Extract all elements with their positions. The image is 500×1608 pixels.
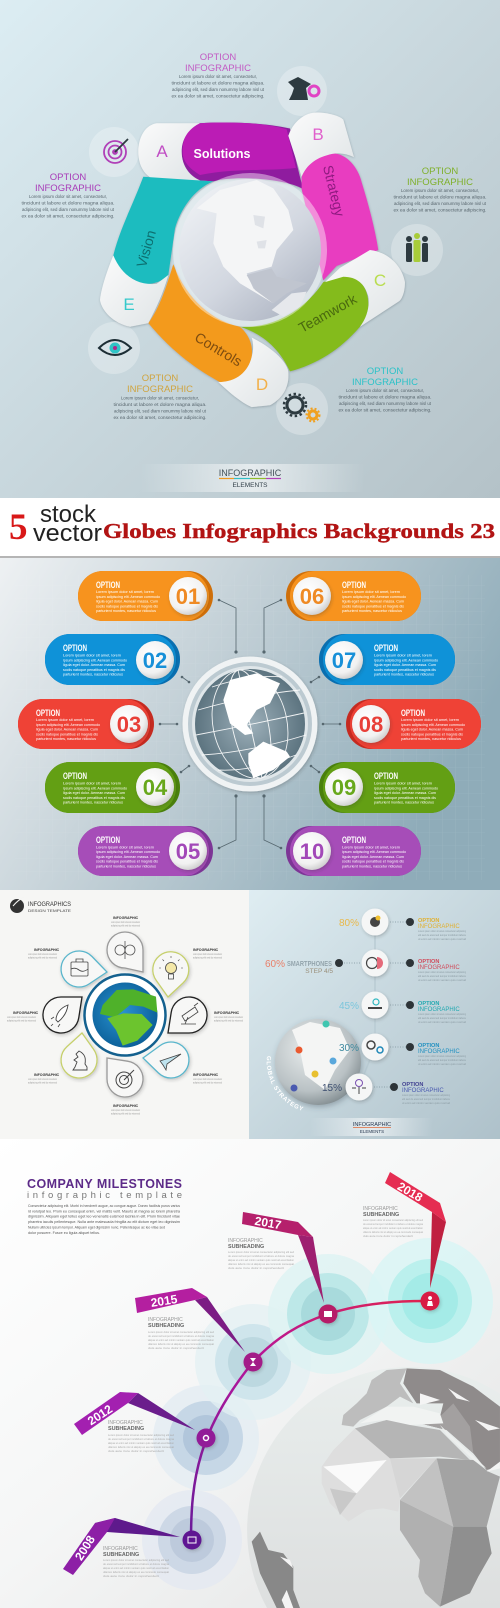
option pill 01: OPTION <box>96 580 120 590</box>
option pill 07: sociis natoque penatibus et magnis dis <box>374 667 436 672</box>
pin labels: adipiscing elit sed do eiusmod <box>28 956 57 960</box>
subheading 2012: INFOGRAPHIC <box>108 1420 143 1426</box>
callout: left option: adipiscing elit, sed diam nonummy labore nisl ut <box>22 207 115 212</box>
step 60 percent: INFOGRAPHIC <box>418 965 460 971</box>
central green globe <box>84 974 166 1056</box>
subheading 2018: ullamco laboris nisi ut aliquip ex ea commodo consequat <box>363 1230 423 1234</box>
callout: bottom left option: OPTION <box>142 373 178 384</box>
panel: company milestones timeline <box>0 1139 500 1608</box>
logo: 5 stock vector: stock <box>40 501 97 528</box>
option pill 01: ipsum adipiscing elit. Aenean commodo <box>96 594 161 599</box>
letters on tabs: E <box>123 295 135 314</box>
target rings 2008 <box>142 1490 242 1590</box>
flag 2012 <box>74 1392 216 1448</box>
pin: right <box>168 997 207 1033</box>
icon: eye <box>99 340 131 355</box>
step 45 percent: elit sed do eiusmod tempor incididunt labore <box>418 1016 466 1020</box>
option pill 03: 03 <box>117 712 141 737</box>
letters on tabs: B <box>312 125 324 144</box>
center globe <box>182 656 318 792</box>
letters on tabs: D <box>256 375 268 394</box>
callout: left option: tincidunt ut labore et dolore magna aliqua. <box>22 200 114 206</box>
option pill 08: ipsum adipiscing elit. Aenean commodo <box>401 722 466 727</box>
icon: target <box>104 139 128 163</box>
subheading 2008: ullamco laboris nisi ut aliquip ex ea commodo consequat <box>103 1570 169 1574</box>
option pill 03: ipsum adipiscing elit. Aenean commodo <box>36 722 101 727</box>
option pill 08: sociis natoque penatibus et magnis dis <box>401 732 463 736</box>
callout: bottom left option: INFOGRAPHIC <box>127 384 193 395</box>
option pill 07: Lorem ipsum dolor sit amet, lorem <box>374 652 433 658</box>
step 15 percent: ut enim ad minim veniam quis nostrud <box>402 1101 450 1105</box>
subheading 2017: do eiusmod tempor incididunt ut labore et dolore magna <box>228 1254 294 1258</box>
option pill 01: ligula eget dolor. Aenean massa. Cum <box>96 598 159 604</box>
callout: left option: ex ea dolor sit amet, consectetur adipiscing. <box>22 214 114 218</box>
option pill 07: ligula eget dolor. Aenean massa. Cum <box>374 662 437 667</box>
option pill 09: parturient montes, nascetur ridiculus <box>374 800 434 804</box>
pin labels: INFOGRAPHIC <box>34 948 60 952</box>
step 60 percent: OPTION <box>418 959 439 965</box>
pin labels: INFOGRAPHIC <box>193 1073 219 1077</box>
pin labels: INFOGRAPHIC <box>113 916 139 920</box>
subheading 2012: aliqua ut enim ad minim veniam quis nostrud exercitation <box>108 1441 174 1445</box>
grid texture <box>15 575 485 880</box>
option pill 10: sociis natoque penatibus et magnis dis <box>342 858 404 864</box>
pin labels: INFOGRAPHIC <box>214 1011 240 1015</box>
pin labels: adipiscing elit sed do eiusmod <box>193 1080 222 1084</box>
option pill 02 <box>45 634 180 685</box>
option pill 04: 04 <box>143 775 168 800</box>
option pill 02: 02 <box>143 648 167 673</box>
option pill 02: ligula eget dolor. Aenean massa. Cum <box>63 662 126 667</box>
subheading 2018: INFOGRAPHIC <box>363 1206 398 1212</box>
callout: bottom left option: adipiscing elit, sed diam nonummy labore nisl ut <box>114 408 207 414</box>
step 80 percent: OPTION <box>418 918 439 924</box>
petal labels <box>133 146 360 369</box>
intro text: dolor posuere. Fusce eu ligula aliquet tellus. <box>28 1231 100 1235</box>
option pill 06: 06 <box>300 584 324 609</box>
pin labels: Lorem ipsum dolor sit amet consectetur <box>111 1108 140 1112</box>
step 30 percent <box>339 1034 466 1066</box>
subheading 2017: SUBHEADING <box>228 1244 264 1250</box>
option pill 04: Lorem ipsum dolor sit amet, lorem <box>63 780 122 786</box>
callout: bottom left option <box>114 373 207 420</box>
step 45 percent: Lorem ipsum dolor sit amet consectetur adipiscing <box>418 1012 466 1016</box>
option pill 03: Lorem ipsum dolor sit amet, lorem <box>36 717 95 722</box>
subheading 2015: INFOGRAPHIC <box>148 1317 183 1323</box>
curved label: GLOBAL STRATEGY <box>266 1056 304 1110</box>
panel: five-petal globe infographic <box>0 0 500 498</box>
step 60 percent: Lorem ipsum dolor sit amet consectetur adipiscing <box>418 970 466 974</box>
callout: bottom right option: ex ea dolor sit amet, consectetur adipiscing. <box>338 408 432 412</box>
option pill 06 <box>286 571 421 621</box>
step 45 percent: ut enim ad minim veniam quis nostrud <box>418 1020 466 1024</box>
option pill 05: Lorem ipsum dolor sit amet, lorem <box>96 844 155 850</box>
step 60 percent: elit sed do eiusmod tempor incididunt labore <box>418 974 466 978</box>
subheading 2017: INFOGRAPHIC <box>228 1238 263 1244</box>
option pill 01 <box>78 571 213 621</box>
pin labels: INFOGRAPHIC <box>13 1011 39 1015</box>
pin labels: adipiscing elit sed do eiusmod <box>7 1018 36 1022</box>
pin labels <box>7 916 243 1116</box>
flag 2012: 2012 <box>85 1402 115 1428</box>
pin labels: adipiscing elit sed do eiusmod <box>28 1080 57 1084</box>
step 80 percent: INFOGRAPHIC <box>418 924 460 930</box>
subheading 2015 <box>148 1317 214 1350</box>
step 15 percent: Lorem ipsum dolor sit amet consectetur adipiscing <box>402 1093 450 1097</box>
subheading 2018: do eiusmod tempor incididunt ut labore et dolore magna <box>363 1222 423 1226</box>
option pill 02: OPTION <box>63 643 87 653</box>
option pill 01: sociis natoque penatibus et magnis dis <box>96 604 158 608</box>
panel: ten options around globe <box>0 558 500 890</box>
heading: COMPANY MILESTONES <box>27 1177 182 1191</box>
option pill 01: 01 <box>176 584 200 609</box>
subheading 2008: INFOGRAPHIC <box>103 1546 138 1552</box>
option pill 09: ipsum adipiscing elit. Aenean commodo <box>374 786 439 790</box>
option pill 10: ipsum adipiscing elit. Aenean commodo <box>342 849 407 854</box>
option pill 03: OPTION <box>36 708 60 718</box>
timeline curve <box>191 1301 430 1540</box>
petal labels: Solutions <box>194 146 250 161</box>
panel: pin petals around green globe <box>0 890 249 1140</box>
step 60 percent: ut enim ad minim veniam quis nostrud <box>418 978 466 982</box>
option pill 09 <box>319 762 455 813</box>
option pill 10 <box>286 826 421 876</box>
flag 2018 <box>385 1172 446 1310</box>
pin labels: Lorem ipsum dolor sit amet consectetur <box>193 952 222 956</box>
step 30 percent: elit sed do eiusmod tempor incididunt labore <box>418 1058 466 1062</box>
petal labels: Strategy <box>320 164 348 218</box>
pin: lower left <box>61 1033 97 1078</box>
callout: left option: Lorem ipsum dolor sit amet, consectetur, <box>29 194 107 199</box>
option pill 02: sociis natoque penatibus et magnis dis <box>63 667 125 672</box>
callout: bottom right option: adipiscing elit, sed diam nonummy labore nisl ut <box>339 401 432 406</box>
step 30 percent: Lorem ipsum dolor sit amet consectetur adipiscing <box>418 1054 466 1058</box>
option pill 07 <box>319 634 455 685</box>
option pill 05 <box>78 826 213 876</box>
step 30 percent: OPTION <box>418 1043 439 1049</box>
polygon world globe <box>247 1367 500 1608</box>
pin: left <box>43 997 82 1033</box>
subheading 2008: Lorem ipsum dolor sit amet consectetur adipiscing elit sed <box>103 1558 169 1562</box>
callout: bottom left option: ex ea dolor sit amet, consectetur adipiscing. <box>114 415 206 420</box>
badge: infographic elements <box>310 1118 433 1136</box>
step 60 percent: STEP 4/5 <box>305 968 333 975</box>
option pill 07: OPTION <box>374 643 398 653</box>
banner <box>0 498 500 558</box>
subheading 2008: SUBHEADING <box>103 1552 139 1558</box>
pin labels: INFOGRAPHIC <box>113 1104 139 1108</box>
step 80 percent: ut enim ad minim veniam quis nostrud <box>418 937 466 941</box>
option pill 10: OPTION <box>342 835 366 845</box>
subheading 2018: duis aute irure dolor in reprehenderit <box>363 1234 413 1238</box>
badge: infographic elements: ELEMENTS <box>360 1129 384 1134</box>
pin: bottom <box>107 1058 143 1097</box>
option pill 04: sociis natoque penatibus et magnis dis <box>63 795 125 800</box>
subheading 2017 <box>228 1238 294 1270</box>
target rings 2015 <box>195 1304 311 1420</box>
option pill 04: ipsum adipiscing elit. Aenean commodo <box>63 786 128 790</box>
subheading 2017: ullamco laboris nisi ut aliquip ex ea commodo consequat <box>228 1262 294 1266</box>
subheading 2015: SUBHEADING <box>148 1323 184 1329</box>
petal ring <box>100 112 405 407</box>
flag 2018: 2018 <box>395 1179 425 1205</box>
subheading 2017: Lorem ipsum dolor sit amet consectetur adipiscing elit sed <box>228 1250 294 1254</box>
pin labels: Lorem ipsum dolor sit amet consectetur <box>193 1077 222 1081</box>
callout: left option: OPTION <box>50 172 86 183</box>
option pill 08: OPTION <box>401 708 425 718</box>
badge: infographic elements <box>140 464 365 492</box>
pin: upper left <box>61 951 107 987</box>
option pill 02: Lorem ipsum dolor sit amet, lorem <box>63 652 122 658</box>
pin: upper right <box>153 952 189 997</box>
subheading 2015: do eiusmod tempor incididunt ut labore et dolore magna <box>148 1334 214 1338</box>
option pill 05: ligula eget dolor. Aenean massa. Cum <box>96 854 159 859</box>
option pill 10: 10 <box>300 839 324 864</box>
spine line <box>359 922 375 1087</box>
subheading 2012: duis aute irure dolor in reprehenderit <box>108 1449 164 1453</box>
step 15 percent: INFOGRAPHIC <box>402 1088 444 1094</box>
option pill 03: ligula eget dolor. Aenean massa. Cum <box>36 726 99 732</box>
option pill 03: sociis natoque penatibus et magnis dis <box>36 732 98 736</box>
option pill 07: parturient montes, nascetur ridiculus <box>374 672 434 676</box>
option pill 05: 05 <box>176 839 200 864</box>
callout: bottom right option: tincidunt ut labore et dolore magna aliqua. <box>338 394 432 400</box>
callout: right option: Lorem ipsum dolor sit amet, consectetur, <box>401 188 479 193</box>
subheading 2018: aliqua ut enim ad minim veniam quis nostrud exercitation <box>363 1226 423 1230</box>
target rings 2018 <box>367 1238 493 1364</box>
option pill 03 <box>18 699 154 749</box>
step 45 percent <box>339 992 466 1024</box>
option pill 01: parturient montes, nascetur ridiculus <box>96 608 156 613</box>
callout: bottom left option: Lorem ipsum dolor sit amet, consectetur, <box>121 396 199 400</box>
grey globe <box>275 1019 361 1105</box>
option pill 06: ligula eget dolor. Aenean massa. Cum <box>342 598 405 604</box>
option pill 06: sociis natoque penatibus et magnis dis <box>342 604 404 608</box>
option pill 01: Lorem ipsum dolor sit amet, lorem <box>96 589 155 594</box>
intro text: Nullam ultricies ipsum tempor. Aliquam eget dignissim nunc. Pellentesque ac leo vitae sed <box>28 1226 165 1230</box>
logo: INFOGRAPHICS <box>28 901 72 908</box>
flag 2015: 2015 <box>150 1292 179 1310</box>
callout: top option: ex ea dolor sit amet, consectetur adipiscing. <box>172 94 264 98</box>
option pill 03: parturient montes, nascetur ridiculus <box>36 736 96 741</box>
step 60 percent: SMARTPHONES <box>287 961 332 968</box>
logo: 5 stock vector: vector <box>33 520 102 547</box>
petal labels: Controls <box>192 329 245 369</box>
intro text <box>28 1204 180 1235</box>
callout: right option: tincidunt ut labore et dolore magna aliqua. <box>394 194 486 200</box>
step 80 percent <box>339 908 466 941</box>
option pill 05: ipsum adipiscing elit. Aenean commodo <box>96 849 161 854</box>
step 30 percent: ut enim ad minim veniam quis nostrud <box>418 1062 466 1066</box>
option pill 08: Lorem ipsum dolor sit amet, lorem <box>401 717 460 722</box>
option pill 02: ipsum adipiscing elit. Aenean commodo <box>63 658 128 662</box>
callout: bottom right option <box>338 366 432 412</box>
letters on tabs: A <box>156 142 168 161</box>
step 80 percent: 80% <box>339 918 359 929</box>
option pill 04 <box>45 762 180 813</box>
pin labels: adipiscing elit sed do eiusmod <box>111 924 140 928</box>
icon: chess knight and gear <box>288 77 319 100</box>
intro text: Consectetur adipiscing elit. Morbi in hendrerit augue, ac congue augue. Donec facilisis purus varius <box>28 1204 180 1208</box>
pin labels: adipiscing elit sed do eiusmod <box>193 956 222 960</box>
subheading 2012: ullamco laboris nisi ut aliquip ex ea commodo consequat <box>108 1445 174 1449</box>
logo: 5 stock vector <box>9 501 102 548</box>
flag 2015 <box>135 1288 262 1372</box>
callout: right option: INFOGRAPHIC <box>407 177 473 188</box>
subheading 2008: do eiusmod tempor incididunt ut labore et dolore magna <box>103 1562 169 1566</box>
option pill 08 <box>346 699 481 749</box>
subheading 2018: Lorem ipsum dolor sit amet consectetur adipiscing elit sed <box>363 1218 423 1222</box>
subheading 2015: duis aute irure dolor in reprehenderit <box>148 1346 204 1350</box>
option pill 10: Lorem ipsum dolor sit amet, lorem <box>342 844 401 850</box>
callout: right option: ex ea dolor sit amet, consectetur adipiscing. <box>394 208 486 212</box>
pin: top <box>107 932 143 972</box>
option pill 08: parturient montes, nascetur ridiculus <box>401 736 461 741</box>
step 80 percent: elit sed do eiusmod tempor incididunt labore <box>418 933 466 937</box>
step 15 percent: 15% <box>322 1083 342 1094</box>
logo: 5 stock vector: 5 <box>9 507 28 548</box>
step 15 percent: OPTION <box>402 1082 423 1088</box>
subheading 2008 <box>103 1546 169 1578</box>
step 45 percent: INFOGRAPHIC <box>418 1007 460 1013</box>
badge: infographic elements: INFOGRAPHIC <box>219 468 282 478</box>
subheading 2015: Lorem ipsum dolor sit amet consectetur adipiscing elit sed <box>148 1330 214 1334</box>
callout: top option: OPTION <box>200 52 236 63</box>
option pill 06: OPTION <box>342 580 366 590</box>
callout: right option <box>394 166 487 212</box>
subheading 2017: aliqua ut enim ad minim veniam quis nostrud exercitation <box>228 1258 294 1262</box>
letters on tabs <box>123 125 386 394</box>
step 15 percent <box>322 1074 450 1105</box>
letters on tabs: C <box>374 271 386 290</box>
step 80 percent: Lorem ipsum dolor sit amet consectetur adipiscing <box>418 929 466 933</box>
option pill 04: OPTION <box>63 771 87 781</box>
title: Globes Infographics Backgrounds 23 <box>103 519 495 543</box>
logo <box>10 897 72 913</box>
option pill 08: 08 <box>359 712 383 737</box>
flag 2008: 2008 <box>72 1533 98 1563</box>
option pill 02: parturient montes, nascetur ridiculus <box>63 672 123 676</box>
subheading 2012: do eiusmod tempor incididunt ut labore et dolore magna <box>108 1437 174 1441</box>
subheading 2008: duis aute irure dolor in reprehenderit <box>103 1574 159 1578</box>
logo: DESIGN TEMPLATE <box>28 909 72 913</box>
callout: top option: adipiscing elit, sed diam nonummy labore nisl ut <box>172 87 265 92</box>
pin labels: Lorem ipsum dolor sit amet consectetur <box>28 1077 57 1081</box>
flag 2008 <box>63 1518 202 1575</box>
panel: percent steps with grey globe <box>249 890 500 1139</box>
callout: left option <box>22 172 115 218</box>
subheading 2018: SUBHEADING <box>363 1212 399 1218</box>
option pill 09: sociis natoque penatibus et magnis dis <box>374 795 436 800</box>
callout: bottom right option: Lorem ipsum dolor sit amet, consectetur, <box>346 388 424 393</box>
pin labels: INFOGRAPHIC <box>34 1073 60 1077</box>
pin labels: Lorem ipsum dolor sit amet consectetur <box>7 1015 36 1019</box>
option pill 06: Lorem ipsum dolor sit amet, lorem <box>342 589 401 594</box>
option pill 10: ligula eget dolor. Aenean massa. Cum <box>342 854 405 859</box>
step 45 percent: 45% <box>339 1001 359 1012</box>
option pill 09: OPTION <box>374 771 398 781</box>
subheading 2015: ullamco laboris nisi ut aliquip ex ea commodo consequat <box>148 1342 214 1346</box>
option pill 05: parturient montes, nascetur ridiculus <box>96 864 156 868</box>
callout: bottom left option: tincidunt ut labore et dolore magna aliqua. <box>114 402 206 407</box>
heading: infographic template <box>27 1190 182 1201</box>
callout: right option: adipiscing elit, sed diam nonummy labore nisl ut <box>394 201 487 206</box>
callout: right option: OPTION <box>422 166 458 177</box>
callout: bottom right option: OPTION <box>367 366 403 377</box>
subheading 2018 <box>363 1206 423 1238</box>
central globe <box>173 173 327 327</box>
callout: top option <box>172 52 265 98</box>
step 45 percent: OPTION <box>418 1001 439 1007</box>
badge: infographic elements: ELEMENTS <box>232 482 268 489</box>
intro text: id volutpat leo. Proin eu consequat enim, vel mattis velit. Mauris at magna ac lorem pharetra <box>28 1210 180 1214</box>
pin labels: Lorem ipsum dolor sit amet consectetur <box>28 952 57 956</box>
icon: gears <box>284 394 320 422</box>
option pill 09: Lorem ipsum dolor sit amet, lorem <box>374 780 433 786</box>
option pill 06: ipsum adipiscing elit. Aenean commodo <box>342 594 407 599</box>
intro text: dignissim. Aliquam eget tellus eget leo venenatis euismod lacinia in elit. Proin tincidunt vitae <box>28 1214 180 1218</box>
callout: top option: tincidunt ut labore et dolore magna aliqua. <box>172 80 264 86</box>
step 30 percent: INFOGRAPHIC <box>418 1049 460 1055</box>
option pill 10: parturient montes, nascetur ridiculus <box>342 864 402 868</box>
subheading 2015: aliqua ut enim ad minim veniam quis nostrud exercitation <box>148 1338 214 1342</box>
flag 2017: 2017 <box>254 1214 283 1232</box>
step 60 percent <box>265 950 466 982</box>
target rings 2017 <box>268 1254 388 1374</box>
subheading 2012: Lorem ipsum dolor sit amet consectetur adipiscing elit sed <box>108 1433 174 1437</box>
option pill 05: OPTION <box>96 835 120 845</box>
option pill 05: sociis natoque penatibus et magnis dis <box>96 858 158 864</box>
option pill 06: parturient montes, nascetur ridiculus <box>342 608 402 613</box>
pin labels: adipiscing elit sed do eiusmod <box>111 1112 140 1116</box>
callout: top option: INFOGRAPHIC <box>185 63 251 74</box>
subheading 2017: duis aute irure dolor in reprehenderit <box>228 1266 284 1270</box>
heading <box>27 1177 182 1201</box>
pin: lower right <box>143 1042 189 1078</box>
intro text: pharetra iaculis pellentesque. Nulla ante malesuada fringilla ac elit dictum eget leo dignissim <box>28 1220 180 1224</box>
option pill 09: ligula eget dolor. Aenean massa. Cum <box>374 790 437 795</box>
pin labels: Lorem ipsum dolor sit amet consectetur <box>111 920 140 924</box>
subheading 2012 <box>108 1420 174 1453</box>
option pill 09: 09 <box>332 775 356 800</box>
option pill 04: parturient montes, nascetur ridiculus <box>63 800 123 804</box>
connector arrows <box>159 599 341 849</box>
option pill 07: 07 <box>332 648 356 673</box>
subheading 2008: aliqua ut enim ad minim veniam quis nostrud exercitation <box>103 1566 169 1570</box>
pin labels: INFOGRAPHIC <box>193 948 219 952</box>
callout: left option: INFOGRAPHIC <box>35 183 101 194</box>
step 60 percent: 60% <box>265 959 285 970</box>
option pill 08: ligula eget dolor. Aenean massa. Cum <box>401 726 464 732</box>
target rings 2012 <box>153 1385 259 1491</box>
petal labels: Teamwork <box>296 290 360 336</box>
callout: bottom right option: INFOGRAPHIC <box>352 377 418 388</box>
flag 2017 <box>242 1212 338 1324</box>
badge: infographic elements: INFOGRAPHIC <box>353 1122 391 1128</box>
option pill 04: ligula eget dolor. Aenean massa. Cum <box>63 790 126 795</box>
option pill 07: ipsum adipiscing elit. Aenean commodo <box>374 658 439 662</box>
pin labels: Lorem ipsum dolor sit amet consectetur <box>214 1015 243 1019</box>
callout: top option: Lorem ipsum dolor sit amet, consectetur, <box>179 74 257 79</box>
step 30 percent: 30% <box>339 1043 359 1054</box>
subheading 2012: SUBHEADING <box>108 1426 144 1432</box>
step 15 percent: elit sed do eiusmod tempor incididunt labore <box>402 1097 450 1101</box>
icon: people <box>406 233 428 262</box>
pin labels: adipiscing elit sed do eiusmod <box>214 1018 243 1022</box>
icon discs <box>88 66 443 435</box>
petal labels: Vision <box>133 228 159 269</box>
